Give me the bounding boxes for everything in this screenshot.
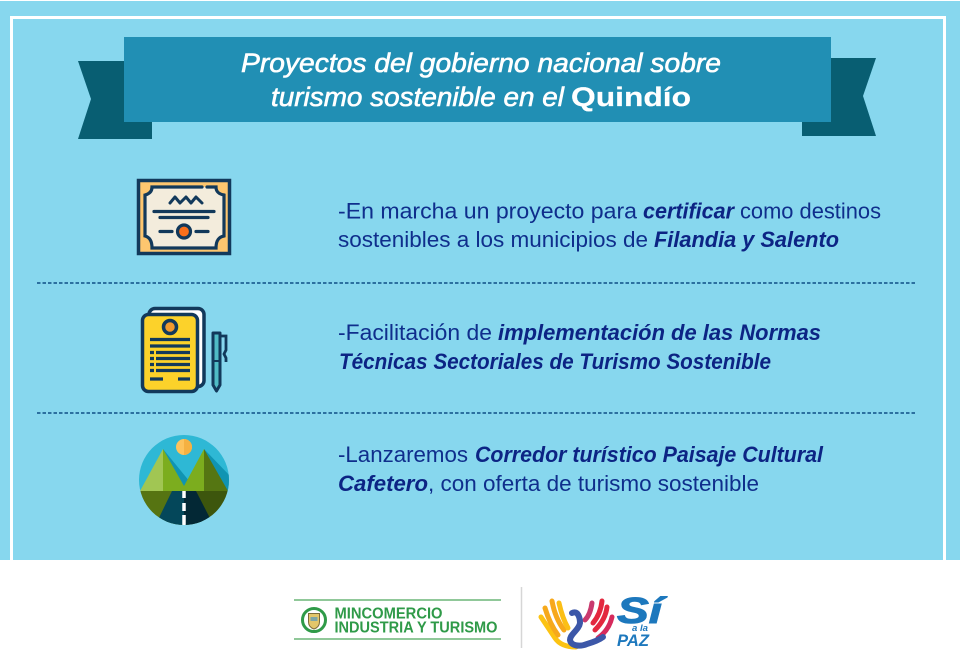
ribbon tail: left <box>78 61 152 139</box>
text: certification project: Filandia y Salento <box>654 227 839 252</box>
text: tourism corridor: Corredor turístico Paisaje Cultural <box>475 442 824 467</box>
icon: coat of arms <box>302 608 326 632</box>
text: certification project <box>338 198 881 252</box>
footer band <box>0 560 960 671</box>
icon: document and pen <box>142 308 226 392</box>
logo: Mincomercio: MINCOMERCIO <box>334 606 442 622</box>
divider <box>37 282 916 284</box>
text: technical standards: -Facilitación de <box>338 320 492 345</box>
banner body <box>124 37 831 122</box>
logo: Mincomercio <box>294 600 501 639</box>
logo: Mincomercio: INDUSTRIA Y TURISMO <box>334 620 498 636</box>
logo: Sí a la Paz: Sí <box>617 590 667 631</box>
text: tourism corridor: -Lanzaremos <box>338 442 468 467</box>
title <box>241 48 721 112</box>
logo: Sí a la Paz: PAZ <box>617 631 650 650</box>
icon: certificate <box>138 180 230 254</box>
divider <box>37 412 916 414</box>
text: certification project: sostenibles a los municipios de <box>338 227 648 252</box>
text: certification project: como destinos <box>740 198 881 224</box>
title: Quindío <box>571 82 691 112</box>
ribbon tail: right <box>802 58 876 136</box>
text: tourism corridor: , con oferta de turismo sostenible <box>428 471 759 496</box>
text: certification project: -En marcha un proyecto para <box>338 198 637 224</box>
logo: Sí a la Paz: a la <box>632 623 648 633</box>
title banner <box>78 37 876 139</box>
logo: Sí a la Paz <box>541 590 667 650</box>
icon: mountain road <box>139 435 232 526</box>
icon: hands and dove <box>541 601 612 647</box>
title: turismo sostenible en el <box>271 82 565 112</box>
text: technical standards <box>338 320 821 374</box>
text: technical standards: implementación de las Normas <box>498 320 821 345</box>
text: tourism corridor: Cafetero <box>338 471 428 496</box>
text: technical standards: Técnicas Sectoriales de Turismo Sostenible <box>339 349 771 374</box>
text: tourism corridor <box>338 442 824 496</box>
logo divider <box>520 587 522 648</box>
text: certification project: certificar <box>643 198 735 224</box>
title: Proyectos del gobierno nacional sobre <box>241 48 721 78</box>
